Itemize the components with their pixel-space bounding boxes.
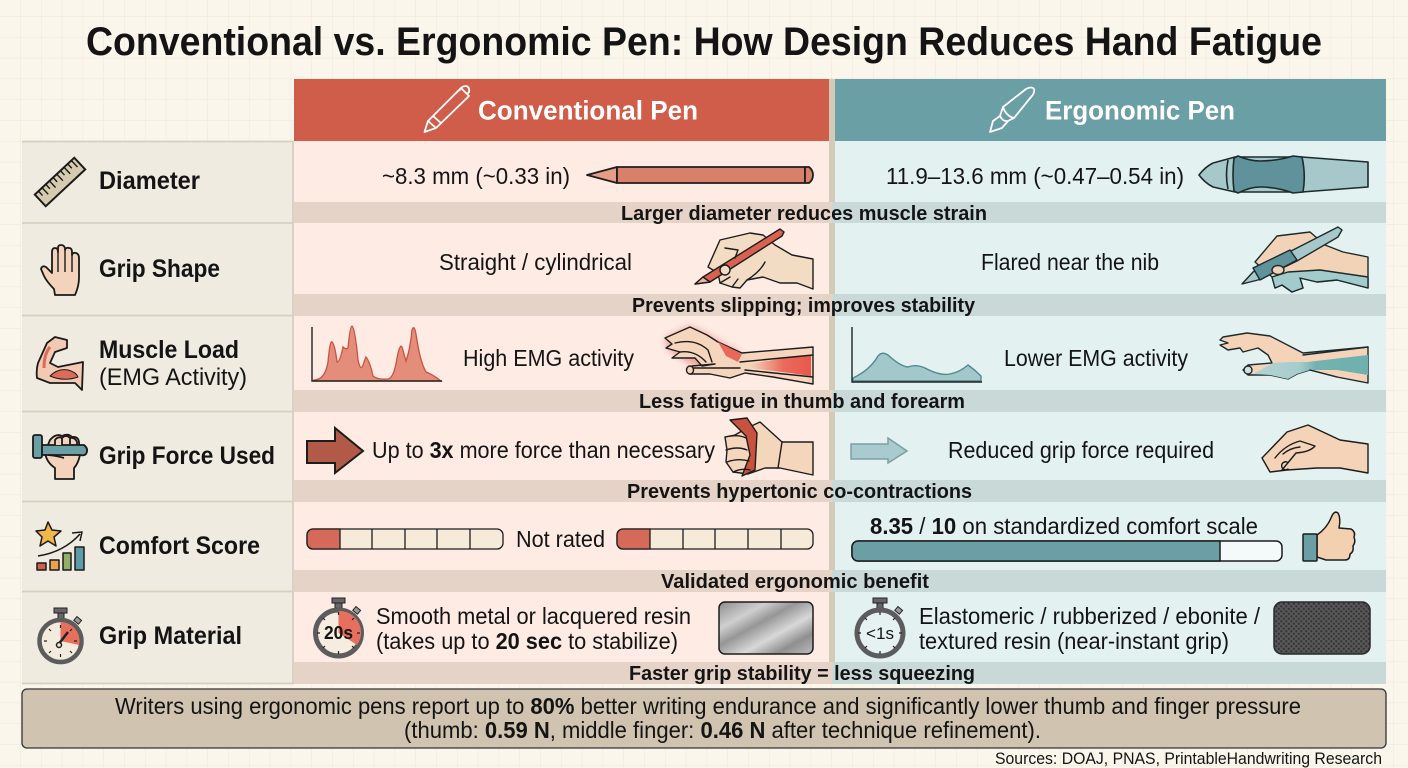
illustration: wide ergonomic pen <box>1199 156 1368 193</box>
caption bar: grip force: Prevents hypertonic co-contractions <box>627 481 972 503</box>
heading: ergonomic pen: Ergonomic Pen <box>1045 96 1235 126</box>
icon: ruler <box>35 158 85 206</box>
icon: under one second stopwatch: <1s <box>866 624 894 643</box>
panel: row label column <box>22 141 294 684</box>
caption bar: muscle load <box>294 390 1386 413</box>
header: ergonomic pen <box>835 79 1386 141</box>
chart: high EMG activity <box>312 326 442 381</box>
row: grip force <box>33 418 1368 479</box>
conventional value: Up to 3x more force than necessary <box>372 437 715 463</box>
caption bar: grip material: Faster grip stability = less squeezing <box>629 663 975 685</box>
icon: small force arrow <box>851 438 907 463</box>
row: grip shape <box>41 227 1368 295</box>
icon: 20 second stopwatch <box>316 598 362 656</box>
comfort progress bar <box>852 541 1282 561</box>
icon: under one second stopwatch <box>857 598 903 656</box>
conventional value: Straight / cylindrical <box>439 249 632 275</box>
caption bar: muscle load: Less fatigue in thumb and forearm <box>639 391 965 413</box>
label: comfort score: Comfort Score <box>99 532 260 560</box>
callout: endurance summary <box>22 689 1386 748</box>
ergonomic value: Reduced grip force required <box>948 437 1214 463</box>
rating bar: right <box>617 529 813 549</box>
icon: thumbs up <box>1303 512 1355 561</box>
ergonomic material note: textured resin (near-instant grip) <box>919 628 1229 654</box>
icon: large force arrow <box>307 428 363 473</box>
rating bar: left <box>307 529 503 549</box>
illustration: strained hand and forearm <box>665 326 813 384</box>
heading: conventional pen: Conventional Pen <box>478 96 698 126</box>
column divider <box>829 79 835 684</box>
callout: endurance summary: Writers using ergonomic pens report up to 80% better writing endurance and significantly lower thumb and finger pressure <box>115 693 1301 719</box>
panel: ergonomic column background <box>835 141 1386 684</box>
ergonomic value: 8.35 / 10 on standardized comfort scale <box>870 513 1258 539</box>
conventional value: Not rated <box>516 526 605 552</box>
label: grip shape: Grip Shape <box>99 255 220 283</box>
label: emg activity: (EMG Activity) <box>99 364 247 391</box>
label: grip material: Grip Material <box>99 622 242 650</box>
ergonomic value: Lower EMG activity <box>1004 345 1188 371</box>
caption bar: grip shape <box>294 294 1386 317</box>
header: conventional pen <box>294 79 829 141</box>
row: grip material <box>40 598 1370 662</box>
caption bar: grip shape: Prevents slipping; improves stability <box>632 295 976 317</box>
illustration: relaxed pinch hand <box>1262 425 1368 473</box>
icon: pen outline <box>424 86 469 132</box>
ergonomic material text: Elastomeric / rubberized / ebonite / <box>919 603 1261 629</box>
icon: stopwatch with needle <box>40 608 82 662</box>
sources: Sources: DOAJ, PNAS, PrintableHandwriting Research <box>995 749 1382 768</box>
caption bar: comfort score: Validated ergonomic benefit <box>661 571 929 593</box>
callout: endurance summary: (thumb: 0.59 N, middle finger: 0.46 N after technique refinement). <box>404 717 1041 743</box>
title: Conventional vs. Ergonomic Pen: How Design Reduces Hand Fatigue <box>86 20 1322 64</box>
row: muscle load <box>37 326 1368 391</box>
conventional value: ~8.3 mm (~0.33 in) <box>382 163 570 189</box>
icon: flexed arm <box>37 337 83 390</box>
chart: lower EMG activity <box>852 327 982 382</box>
icon: 20 second stopwatch: 20s <box>324 623 353 643</box>
label: diameter: Diameter <box>99 167 200 195</box>
illustration: hand gripping ergonomic pen <box>1242 227 1368 292</box>
icon: fist gripping handle <box>33 435 87 479</box>
caption bar: comfort score <box>294 570 1386 593</box>
conventional value: High EMG activity <box>463 345 634 371</box>
ergonomic value: Flared near the nib <box>981 249 1159 275</box>
illustration: hand gripping straight pen <box>695 229 813 289</box>
row: diameter <box>35 156 1368 206</box>
ergonomic value: 11.9–13.6 mm (~0.47–0.54 in) <box>886 163 1184 189</box>
swatch: textured rubber <box>1274 602 1370 654</box>
illustration: slim pen <box>587 167 813 183</box>
caption bar: grip force <box>294 480 1386 503</box>
swatch: polished metal <box>719 602 813 654</box>
icon: star and rising bars <box>36 522 84 570</box>
label: grip force used: Grip Force Used <box>99 442 275 470</box>
illustration: relaxed hand and forearm <box>1220 333 1368 383</box>
caption bar: grip material <box>294 662 1386 685</box>
conventional material text: Smooth metal or lacquered resin <box>376 603 691 629</box>
icon: open hand <box>41 245 79 295</box>
caption bar: diameter <box>294 202 1386 225</box>
label: muscle load: Muscle Load <box>99 336 239 364</box>
illustration: clenched fist <box>725 418 813 476</box>
conventional material note: (takes up to 20 sec to stabilize) <box>376 628 678 654</box>
caption bar: diameter: Larger diameter reduces muscle strain <box>621 203 987 225</box>
icon: ergonomic pen outline <box>990 88 1034 132</box>
panel: conventional column background <box>294 141 829 684</box>
row: comfort score <box>36 512 1355 570</box>
